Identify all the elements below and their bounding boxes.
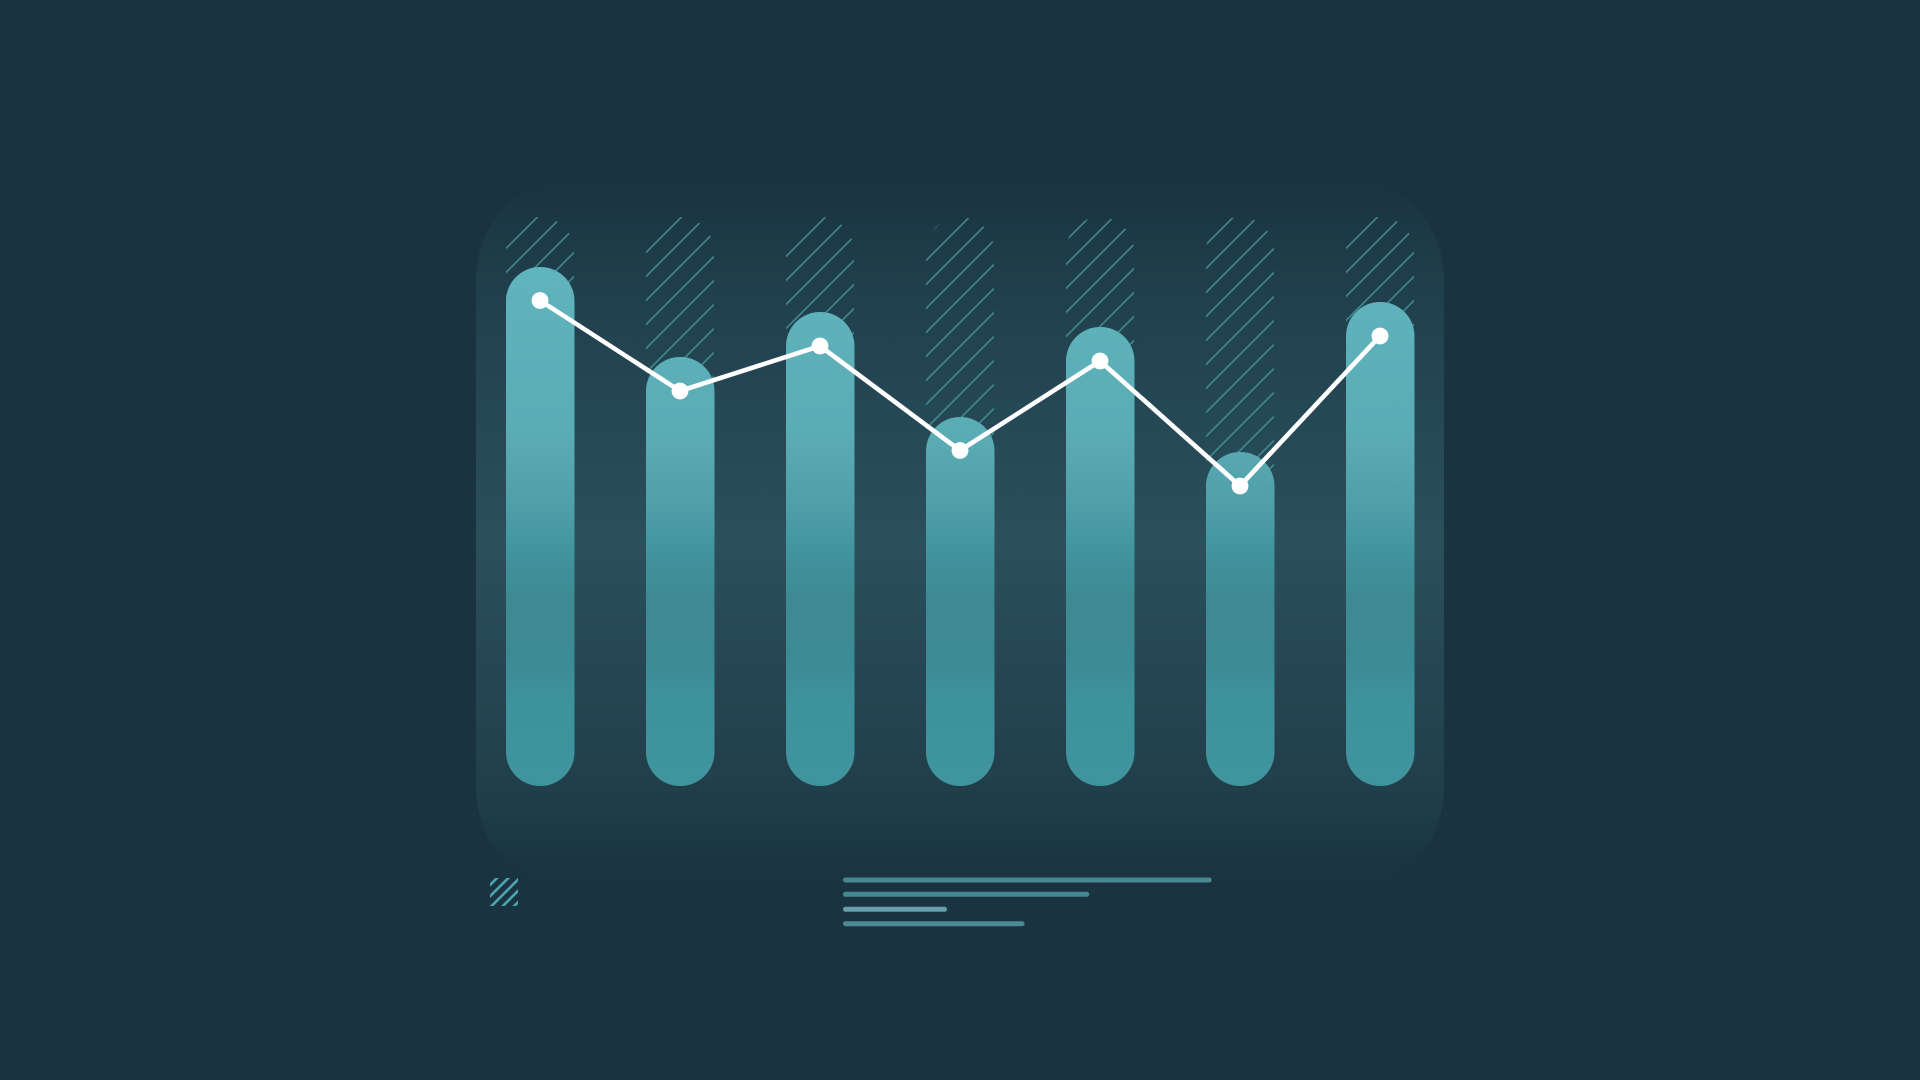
hatch: column 7 — [1346, 217, 1414, 326]
hatched target columns — [506, 217, 1414, 484]
line chart overlay — [532, 292, 1388, 494]
bar 7 — [1346, 302, 1414, 786]
hatch: column 4 — [926, 218, 994, 436]
legend swatch: hatched — [490, 878, 518, 906]
hatch: column 1 — [506, 217, 574, 298]
bar 3 — [786, 312, 854, 786]
placeholder line 4 — [843, 921, 1025, 926]
placeholder line 1 — [843, 878, 1212, 882]
bar 1 — [506, 267, 574, 786]
trend line — [540, 300, 1380, 486]
placeholder line 2 — [843, 892, 1089, 897]
bar chart — [506, 267, 1414, 786]
hatch: column 5 — [1066, 218, 1134, 360]
panel: chart backdrop — [476, 180, 1444, 888]
legend text placeholders — [843, 878, 1212, 926]
hatch: column 3 — [786, 217, 854, 335]
bar 6 — [1206, 452, 1274, 786]
placeholder line 3 — [843, 907, 947, 912]
bar 4 — [926, 417, 994, 786]
bar 2 — [646, 357, 714, 786]
hatch: column 6 — [1206, 218, 1274, 484]
hatch: column 2 — [646, 217, 714, 378]
data points — [532, 292, 1388, 494]
infographic canvas — [476, 217, 1444, 926]
bar 5 — [1066, 327, 1134, 786]
